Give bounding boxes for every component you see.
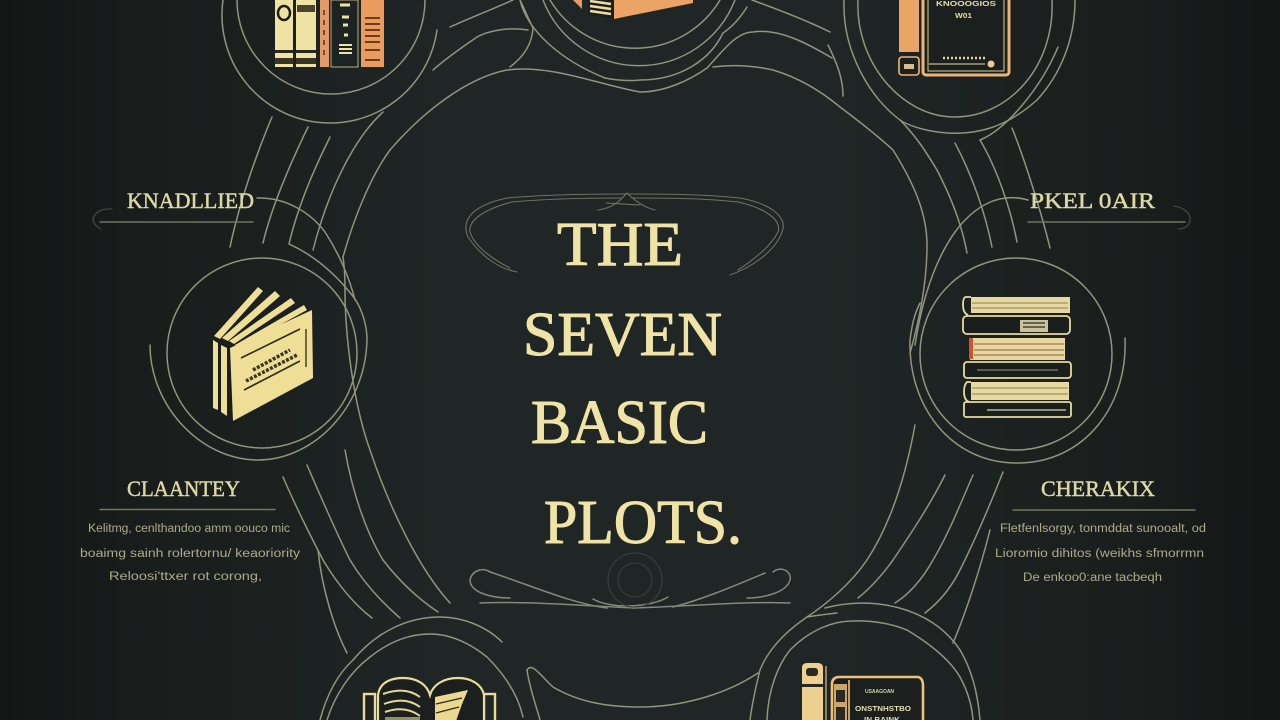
text block: lower right: De enkoo0:ane tacbeqh — [1023, 572, 1162, 584]
text block: lower left: Kelitmg, cenlthandoo amm oouco mic — [88, 523, 290, 535]
icon: stack of books — [963, 297, 1071, 417]
icon: open book — [364, 678, 495, 720]
circle: left — [150, 258, 367, 460]
label: upper right — [1028, 188, 1190, 229]
central ring linework — [343, 31, 927, 720]
text block: lower left — [80, 476, 300, 583]
circle: top left — [222, 0, 437, 123]
title: SEVEN — [523, 301, 722, 369]
icon: fanned book — [213, 287, 313, 421]
title: PLOTS. — [544, 489, 742, 557]
circle: right — [910, 258, 1125, 463]
text block: lower right: Lioromio dihitos (weikhs sfmorrmn — [995, 548, 1204, 560]
icon: hardback book: KNOOOGIOS — [936, 1, 996, 8]
text block: lower right: Fletfenlsorgy, tonmddat sunooalt, od — [1000, 523, 1206, 535]
text block: lower left: boaimg sainh rolertornu/ keaoriority — [80, 548, 300, 560]
label: upper left — [93, 188, 254, 229]
icon: book with bookmark — [802, 663, 923, 720]
icon: book with bookmark: ONSTNHSTBO — [855, 704, 911, 713]
icon: book with bookmark: USAAGOAN — [865, 689, 894, 695]
text block: lower left: CLAANTEY — [127, 476, 240, 501]
circle: top centre — [543, 0, 735, 66]
circle: bottom right — [767, 603, 980, 720]
title ornament: top — [466, 193, 783, 275]
circle: bottom left — [320, 617, 523, 720]
icon: row of books — [275, 0, 384, 67]
icon: hardback book: W01 — [955, 13, 972, 20]
title — [523, 211, 742, 557]
title: BASIC — [531, 389, 708, 457]
title: THE — [557, 211, 683, 279]
label: upper left: KNADLLIED — [127, 188, 254, 213]
text block: lower right: CHERAKIX — [1041, 476, 1155, 501]
text block: lower right — [995, 476, 1206, 584]
right flowing arcs — [858, 47, 1058, 643]
left flowing arcs — [230, 117, 438, 653]
circle: top right — [844, 0, 1075, 133]
label: upper right: PKEL 0AIR — [1030, 188, 1155, 213]
title ornament: bottom — [470, 553, 790, 608]
icon: closed book — [573, 0, 693, 19]
text block: lower left: Reloosi'ttxer rot corong, — [109, 571, 262, 583]
icon: hardback book — [899, 0, 1009, 75]
top connecting arcs — [433, 0, 843, 96]
